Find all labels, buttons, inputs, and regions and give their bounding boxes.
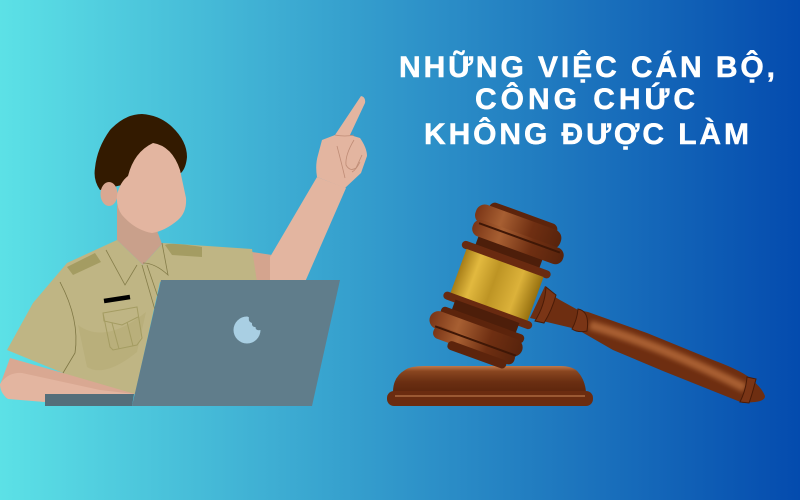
upper collar <box>461 240 552 279</box>
upper barrel <box>475 232 544 270</box>
gold band <box>450 249 544 321</box>
epaulette right <box>165 244 202 257</box>
epaulette left <box>67 253 101 275</box>
name tag <box>104 297 130 301</box>
head <box>95 114 187 233</box>
title <box>399 50 775 151</box>
gavel head <box>422 195 573 375</box>
hair <box>95 114 187 190</box>
pocket <box>103 307 142 350</box>
raised upper arm shadow <box>252 252 272 282</box>
lower collar <box>442 291 533 330</box>
title: NHỮNG VIỆC CÁN BỘ, <box>399 50 775 84</box>
gavel handle <box>530 286 765 403</box>
title: CÔNG CHỨC <box>475 82 695 116</box>
gavel block <box>387 366 593 406</box>
lower barrel <box>450 300 519 338</box>
laptop <box>45 280 340 406</box>
raised arm <box>270 177 346 282</box>
left forearm <box>0 358 135 402</box>
face <box>117 143 186 233</box>
handle collars <box>535 287 756 403</box>
shirt <box>7 240 257 394</box>
illustration: judge gavel <box>387 195 765 406</box>
title: KHÔNG ĐƯỢC LÀM <box>424 117 749 151</box>
laptop logo <box>234 316 260 344</box>
hand pointing up <box>316 96 367 188</box>
neck <box>117 205 162 265</box>
left hand <box>0 373 135 402</box>
illustration: civil servant with laptop <box>0 96 367 406</box>
ear <box>100 182 118 206</box>
